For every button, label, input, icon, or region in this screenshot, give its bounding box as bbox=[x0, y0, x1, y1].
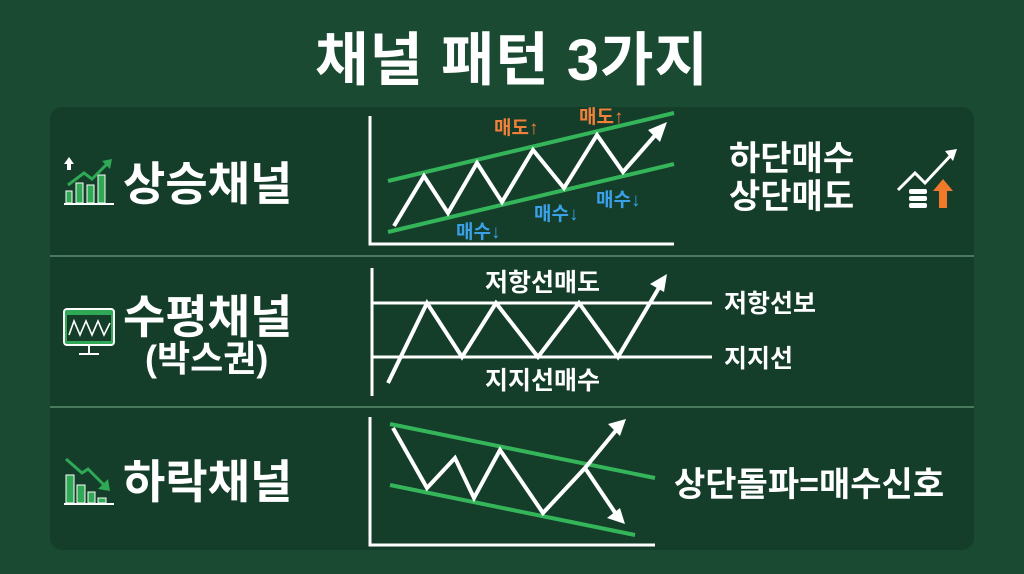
subheading: 박스권: (박스권) bbox=[145, 338, 268, 379]
icon: monitor bbox=[63, 308, 115, 355]
panel: main bbox=[50, 107, 974, 550]
text: 하단매수 상단매도 bbox=[729, 140, 854, 216]
icon: falling bars bbox=[64, 458, 114, 505]
heading: 수평채널: 수평채널 bbox=[123, 291, 292, 343]
chart: rising channel: 매수↓ bbox=[596, 189, 640, 211]
heading: 상승채널: 상승채널 bbox=[123, 158, 292, 210]
chart: rising channel: 매수↓ bbox=[534, 203, 578, 225]
heading: 하락채널: 하락채널 bbox=[123, 456, 292, 508]
icon: rising bars bbox=[64, 157, 114, 205]
chart: rising channel: 매도↑ bbox=[579, 106, 623, 128]
label: 지지선매수: 지지선매수 bbox=[485, 367, 600, 395]
chart: rising channel: 매도↑ bbox=[494, 117, 538, 139]
text: 상단돌파=매수신호: 상단돌파=매수신호 bbox=[674, 466, 944, 504]
text: 하단매수 상단매도: 상단매도 bbox=[729, 178, 854, 216]
icon: coins up bbox=[897, 149, 957, 208]
label: 지지선: 지지선 bbox=[724, 345, 793, 373]
label: 저항선매도: 저항선매도 bbox=[485, 269, 600, 297]
chart: rising channel: 매수↓ bbox=[456, 221, 500, 243]
text: 하단매수 상단매도: 하단매수 bbox=[729, 140, 854, 178]
label: 저항선보: 저항선보 bbox=[724, 290, 816, 318]
title: 채널 패턴 3가지 bbox=[315, 28, 709, 93]
